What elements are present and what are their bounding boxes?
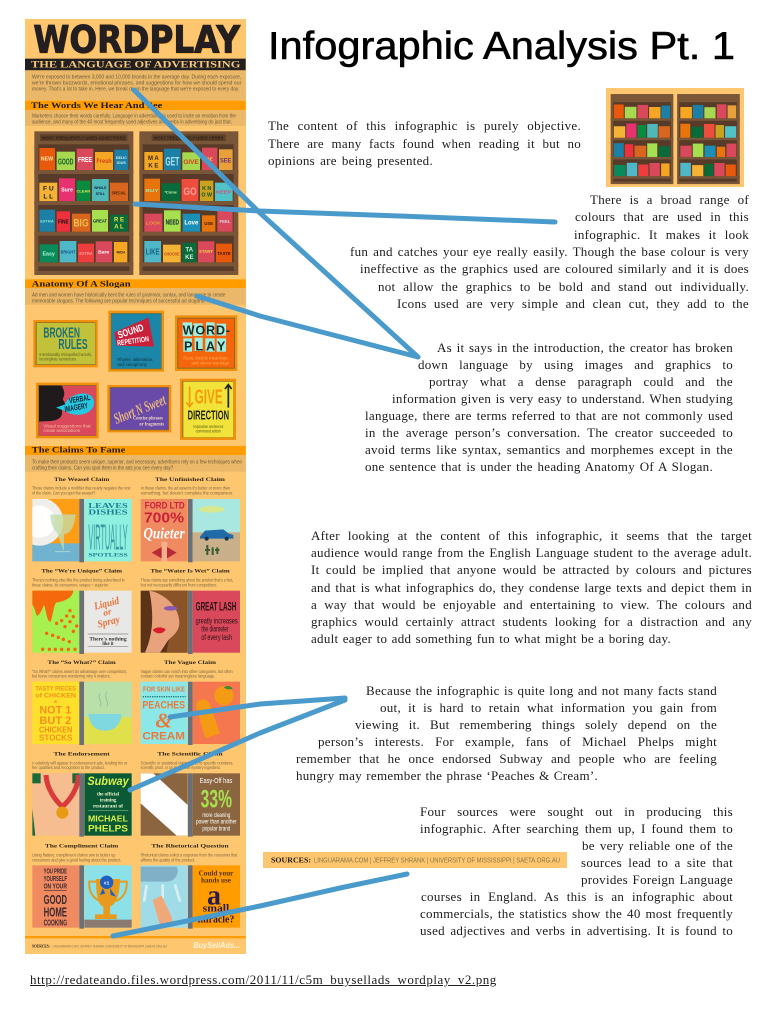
ad: Leaves Dishes: SPOTLESS xyxy=(88,553,128,559)
ad: Chicken Stocks: CHICKEN xyxy=(39,725,73,734)
shelf words: adjectives: Bare xyxy=(98,250,109,256)
ad: Small Miracle: small xyxy=(203,904,230,915)
arrow: sources to sources strip xyxy=(113,874,407,936)
ad: Easy-Off 33 percent: Easy-Off has xyxy=(200,776,233,785)
shelf words: verbs: K N xyxy=(202,186,211,192)
claim heading: Unique and Water Is Wet: The “We're Unique” Claim xyxy=(41,569,123,575)
claim heading: Endorsement and Scientific: The Endorsement xyxy=(54,752,110,758)
frame: Word-Play: and clever wordage xyxy=(191,360,230,366)
frame: Verbal Imagery: Visual suggestions that xyxy=(43,423,91,429)
shelf words: adjectives: L L xyxy=(43,193,53,200)
text block: target audience: graphics would certainly attract students looking for a distraction and any xyxy=(311,614,752,629)
shelf words: verbs: KE xyxy=(185,255,193,261)
claim heading: Compliment and Rhetorical: consumers and give a good feeling about the product. xyxy=(32,857,121,863)
shelf words: verbs: LOOK xyxy=(146,221,161,227)
shelf words: verbs: GO xyxy=(183,186,197,198)
section text: claims xyxy=(25,455,246,472)
text block: language: avoid terms like syntax, semantics and morphemes except in the xyxy=(365,442,733,457)
frame: Give Direction: DIRECTION xyxy=(188,409,229,423)
ad: Good Home Cooking: #1 xyxy=(104,880,110,886)
shelf words: adjectives xyxy=(40,155,127,257)
text block: language: As it says in the introduction, the creator has broken xyxy=(437,340,733,355)
claim heading: Unique and Water Is Wet: These claims say something about the product that's a fact, xyxy=(141,578,233,584)
shelf words: adjectives: IOUS xyxy=(117,161,126,165)
poster footer: sources and logo: SOURCES: xyxy=(32,945,50,949)
frame: Sound Repetition: Rhyme, alliteration, xyxy=(117,357,153,363)
shelf words: adjectives: STILL xyxy=(96,192,105,196)
ad: Peaches and Cream: FOR SKIN LIKE xyxy=(143,684,185,693)
section heading: The Claims To Fame xyxy=(25,446,246,455)
shelf words: verbs xyxy=(145,154,231,261)
shelf words: adjectives: Fresh xyxy=(96,158,112,165)
poster footer: sources and logo xyxy=(25,936,246,950)
shelf words: verbs: *Come xyxy=(164,190,178,195)
ad: Easy-Off 33 percent: 33% xyxy=(201,787,232,814)
text block: sources: infographic. After searching them up, I found them to xyxy=(420,821,733,836)
shelf words: adjectives: SPECIAL xyxy=(112,190,126,195)
ad bottoms: Chicken Stocks, Peaches and Cream text: CREAM xyxy=(142,731,185,743)
ad: Great Lash xyxy=(141,591,240,654)
claim heading: So What and Vague: The Vague Claim xyxy=(164,660,217,666)
ad: Chicken Stocks xyxy=(32,682,132,745)
ad: Chicken Stocks: BUT 2 xyxy=(39,715,71,727)
frame: Verbal Imagery xyxy=(36,383,99,438)
frame: Give Direction: GIVE xyxy=(195,386,223,409)
claim heading: So What and Vague: but leave consumers wondering why it matters. xyxy=(32,674,111,680)
claim heading: Weasel and Unfinished: The Unfinished Claim xyxy=(155,477,226,483)
claim heading: Compliment and Rhetorical: Using flattery, compliment claims aim to butter up xyxy=(32,853,116,859)
text block: objectivity: opinions are being presented. xyxy=(268,153,433,168)
shelf words: adjectives: FREE xyxy=(78,155,92,164)
section text: words xyxy=(25,110,246,126)
shelf words: verbs: GET xyxy=(165,154,180,168)
poster title: WORDPLAY: WORDPLAY xyxy=(34,19,242,63)
section: claims rows one to three: VIRTUALLY xyxy=(88,516,128,557)
poster subtitle band: THE LANGUAGE OF ADVERTISING xyxy=(31,61,240,71)
ad: Easy-Off 33 percent xyxy=(141,773,240,837)
text block: retention: remember that he once endorsed Subway and people who are feeling xyxy=(296,751,717,766)
section text: slogans: Ad men and women have historically bent the rules of grammar, syntax, and language to create xyxy=(32,293,225,299)
text block: target audience: adult eager to add something fun to what might be a boring day. xyxy=(311,631,671,646)
bookshelves xyxy=(34,131,238,275)
shelf words: verbs: O W xyxy=(201,193,213,199)
text block: colours and icons: Icons used are very simple and clean cut, they add to the xyxy=(397,296,749,311)
ad: Great Lash: the diameter xyxy=(201,624,229,633)
text block: colours and icons: ineffective as the graphics used are coloured similarly and it is does xyxy=(360,261,749,276)
shelf words: verbs: USE xyxy=(204,221,213,226)
claim heading: Weasel and Unfinished: The Weasel Claim xyxy=(54,477,110,483)
text block: objectivity xyxy=(268,118,581,168)
ad: Leaves Dishes xyxy=(32,499,132,562)
frame: Give Direction: command action xyxy=(196,428,221,434)
text block: target audience: a way that would be enjoyable and entertaining to view. The colours and xyxy=(311,597,752,612)
arrow lines: blue annotation strokes xyxy=(113,90,555,936)
ad: Subway Michael Phelps: MICHAEL xyxy=(88,814,128,824)
poster header and bookshelves xyxy=(25,18,246,275)
ad: Liquid or Spray: There's nothing xyxy=(89,636,127,642)
text block: objectivity: The content of this infographic is purely objective. xyxy=(268,118,581,133)
claim heading: Compliment and Rhetorical: affirms the quality of the product. xyxy=(141,857,195,863)
shelf words: adjectives: Easy xyxy=(42,251,55,257)
page title: Infographic Analysis Pt. 1 xyxy=(268,25,735,68)
frame: Verbal Imagery: create associations xyxy=(43,428,80,434)
claim heading: Unique and Water Is Wet xyxy=(32,569,233,588)
text block: sources: courses in England. As this is an infographic about xyxy=(421,889,733,904)
section text: slogans: memorable slogans. The following are popular techniques of successful ad slogans. xyxy=(32,299,205,305)
frame: Give Direction xyxy=(180,379,236,440)
text block: colours and icons: not allow the graphics to be bold and stand out individually. xyxy=(378,278,749,294)
text block: sources: Four sources were sought out in producing this xyxy=(420,804,733,819)
text block: target audience: and that is what infographics do, they condense large texts and depict them in xyxy=(311,580,752,595)
ad: Chicken Stocks: & xyxy=(54,699,58,705)
arrow: slogan text to language paragraph xyxy=(197,296,418,357)
claim heading: Unique and Water Is Wet: these claims. Its consumers, unique = superior. xyxy=(32,582,109,588)
claim heading: Weasel and Unfinished: something, but doesn't complete the comparison. xyxy=(141,490,233,496)
infographic: Wordplay poster xyxy=(15,18,246,954)
ad: Subway Michael Phelps: Subway xyxy=(87,774,130,788)
shelf words: adjectives: DELIC xyxy=(116,156,127,160)
inset: sources strip: SOURCES: xyxy=(271,856,311,864)
section: claims rows four and five and footer xyxy=(25,731,246,950)
shelf words: verbs: BE xyxy=(207,156,213,161)
frame: Broken Rules xyxy=(33,320,98,367)
section text: claims: crafting their claims. Can you spot them in the ads you see every day? xyxy=(32,465,173,471)
ad: Chicken Stocks: NOT 1 xyxy=(39,705,71,717)
ad: Liquid or Spray: or xyxy=(102,607,113,619)
text block: retention: out, it is hard to retain what information you gain from xyxy=(380,700,717,715)
frame: Sound Repetition xyxy=(108,311,164,372)
section heading: Anatomy Of A Slogan xyxy=(25,279,246,289)
ad: Liquid or Spray: Liquid xyxy=(92,596,121,613)
shelf words: verbs: K E xyxy=(148,164,158,170)
ad: Leaves Dishes: DISHES xyxy=(88,508,128,517)
frame: Sound Repetition: REPETITION xyxy=(117,334,149,348)
ad: Small Miracle: a xyxy=(207,880,221,911)
frame: Broken Rules: RULES xyxy=(58,337,88,353)
text block: target audience: audience would range from the English Language student to the average adult. xyxy=(311,545,752,560)
shelf words: adjectives: GOOD xyxy=(58,156,73,166)
claim heading: So What and Vague: Vague claims can reach into other categories, but often xyxy=(141,669,233,675)
frame: Sound Repetition: and cacophony xyxy=(117,362,147,368)
shelf words: adjectives: GREAT xyxy=(93,218,107,224)
text block: retention xyxy=(296,683,717,783)
ad: Easy-Off 33 percent: popular brand xyxy=(202,825,231,832)
shelf words: verbs: LIKE xyxy=(146,246,160,256)
ad: Good Home Cooking: HOME xyxy=(44,905,67,919)
frame: Word-Play: PLAY xyxy=(184,339,226,353)
poster intro text: We're exposed to between 3,000 and 10,000 brands in the average day. During each exposure, xyxy=(32,75,241,81)
text block: objectivity: There are many facts found when reading it but no xyxy=(268,136,581,150)
claim heading: Compliment and Rhetorical xyxy=(32,844,238,863)
section text: claims: To make their products seem unique, superior, and necessary, advertisers rely on a few techniques when xyxy=(32,459,242,465)
ad: Subway Michael Phelps: restaurant of xyxy=(93,805,123,810)
shelf words: adjectives: R E xyxy=(114,218,124,224)
shelf words: adjectives: RICH xyxy=(117,251,125,255)
shelf words: verbs: FEEL xyxy=(219,219,231,224)
shelf words: adjectives: WHOLE xyxy=(94,186,107,190)
claim heading: Endorsement and Scientific: A celebrity will appear in endorsement ads, lending his or xyxy=(32,761,128,767)
text block: colours and icons: There is a broad range of xyxy=(590,192,749,207)
ad: Small Miracle: hands use xyxy=(201,875,232,884)
frame: Short N Sweet: or fragments xyxy=(139,422,164,427)
claim heading: So What and Vague xyxy=(32,660,233,680)
claim heading: So What and Vague: “So What?” claims assert an advantage over competitors, xyxy=(32,669,127,675)
ad: Subway Michael Phelps: training xyxy=(100,799,117,804)
bookshelves: MOST FREQUENTLY USED VERBS xyxy=(154,135,223,140)
ad: Subway Michael Phelps xyxy=(32,773,132,837)
claim heading: Unique and Water Is Wet: but not necessarily different from competitors. xyxy=(141,582,217,588)
text block: retention: person’s interests. For example, fans of Michael Phelps might xyxy=(318,734,717,749)
ad: Good Home Cooking: YOURSELF xyxy=(44,874,67,883)
ad: Ford LTD: Quieter xyxy=(143,525,186,542)
poster intro text: we're thrown buzzwords, emotional phrases, and suggestions for how we should spend our xyxy=(32,81,242,87)
shelf words: verbs: TASTE xyxy=(217,251,231,257)
claim heading: Weasel and Unfinished: of the claim. Can you spot the weasel? xyxy=(32,490,95,496)
claim heading: Unique and Water Is Wet: There's nothing else like the product being advertised in xyxy=(32,578,125,584)
frame: Word-Play: WORD- xyxy=(183,323,230,337)
shelf words: verbs: KEEP xyxy=(216,190,231,195)
section text: slogans xyxy=(25,288,246,305)
claim heading: Unique and Water Is Wet: The “Water Is Wet” Claim xyxy=(150,569,230,575)
text block: retention: Because the infographic is quite long and not many facts stand xyxy=(366,683,717,698)
claim heading: Endorsement and Scientific: scientific proof, or an impressive mystery ingredient. xyxy=(141,765,221,771)
ad: Liquid or Spray: Spray xyxy=(96,614,121,631)
text block: target audience: After looking at the content of this infographic, it seems that the target xyxy=(311,528,752,543)
claim heading: So What and Vague: The “So What?” Claim xyxy=(48,660,116,666)
poster subtitle band xyxy=(25,59,246,71)
text block: colours and icons: infographic. It makes it look xyxy=(574,227,749,242)
ad: Good Home Cooking: YOU PRIDE xyxy=(44,867,67,876)
ad: Good Home Cooking xyxy=(32,865,132,929)
claim heading: Weasel and Unfinished xyxy=(32,477,233,496)
ad: Great Lash: of every lash xyxy=(201,633,232,642)
shelf words: adjectives: EXTRA xyxy=(40,218,54,223)
shelf words: verbs: Love xyxy=(184,220,199,226)
text block: language: down language by using images and graphics to xyxy=(418,357,733,372)
text block: sources: used adjectives and verbs in advertising. It is found to xyxy=(420,923,733,938)
frame: Verbal Imagery: IMAGERY xyxy=(64,401,89,414)
section: Anatomy Of A Slogan xyxy=(25,279,246,496)
text block: sources: sources lead to a site that xyxy=(581,855,733,870)
ad: Great Lash: greatly increases xyxy=(196,616,238,625)
ad: Small Miracle: miracle? xyxy=(198,914,234,925)
claim heading: Weasel and Unfinished: In these claims, the ad asserts it's better or more than xyxy=(141,486,230,492)
frame: Word-Play: Puns, double meanings, xyxy=(183,356,229,362)
shelf words: verbs: GIVE xyxy=(183,159,199,166)
poster footer: sources and logo: LINGUARAMA.COM | JEFFREY SHRANK | UNIVERSITY OF MISSISSIPPI | SAETA.ORG.AU xyxy=(53,945,167,949)
frame: Give Direction: Imperative sentences xyxy=(193,424,224,430)
text block: sources: be very reliable one of the xyxy=(582,838,733,853)
text block: sources: provides Foreign Language xyxy=(581,872,733,887)
bookshelves: MOST FREQUENTLY USED ADJECTIVES xyxy=(42,135,125,140)
text block: colours and icons: colours that are used in this xyxy=(575,209,749,224)
claim heading: Endorsement and Scientific: The Scientific Claim xyxy=(157,752,223,758)
text block: language: one sentence that is under the heading Anatomy Of A Slogan. xyxy=(365,459,713,474)
frame: Sound Repetition: SOUND xyxy=(117,323,145,341)
ad: Chicken Stocks: STOCKS xyxy=(39,733,73,742)
claim heading: Endorsement and Scientific xyxy=(32,752,233,771)
text block: language: information given is very easy to understand. When studying xyxy=(392,391,733,406)
section heading: The Words We Hear And See: The Words We Hear And See xyxy=(31,101,163,110)
inset: bookshelf crop xyxy=(606,88,744,187)
claim heading: Endorsement and Scientific: her qualities and recognition to the product. xyxy=(32,765,105,771)
ad: Peaches and Cream xyxy=(141,682,240,745)
claim heading: Weasel and Unfinished: These claims include a modifier that nearly negates the rest xyxy=(32,486,131,492)
poster footer: sources and logo: BuySellAds... xyxy=(193,940,240,950)
ad: Liquid or Spray xyxy=(32,591,132,654)
text block: target audience xyxy=(311,528,752,646)
poster intro text: money. That's a lot to take in. Here, we break down the language that we're exposed to every day. xyxy=(32,87,239,93)
shelf words: adjectives: NEW xyxy=(41,157,54,163)
frame: Broken Rules: BROKEN xyxy=(43,325,80,341)
text block: target audience: It could be implied that anyone would be attracted by colours and pictures xyxy=(311,562,752,577)
claim heading: Endorsement and Scientific: Scientific or statistical claims refer to specific numbers, xyxy=(141,761,233,767)
ad: Peaches and Cream: & xyxy=(155,708,172,732)
ad: Ford LTD: 700% xyxy=(144,511,184,527)
section: claims rows one to three xyxy=(15,498,240,745)
source link: http://redateando.files.wordpress.com/2011/11/c5m_buysellads_wordplay_v2.png xyxy=(30,972,497,987)
arrow: subway ad to retention paragraph xyxy=(130,700,345,790)
text block: language: in the average person’s conversation. The creator succeeded to xyxy=(365,425,733,440)
ad: Good Home Cooking: ON YOUR xyxy=(44,881,67,890)
frame: Broken Rules: incomplete sentences xyxy=(39,357,76,363)
frame: Word-Play xyxy=(175,315,237,371)
shelf words: verbs: M A xyxy=(148,156,159,162)
shelf words: verbs: TA xyxy=(186,248,194,254)
frame: Verbal Imagery: VERBAL xyxy=(68,393,91,405)
claim heading: So What and Vague: contain colorful yet meaningless language. xyxy=(141,674,215,680)
ad: Good Home Cooking: COOKING xyxy=(44,917,67,927)
arrow: bookshelves to colours paragraph xyxy=(135,204,555,222)
ad: Subway Michael Phelps: the official xyxy=(97,793,120,798)
text block: language xyxy=(365,340,733,474)
frame: Short N Sweet: Concise phrases xyxy=(133,417,163,422)
ad: Great Lash: GREAT LASH xyxy=(196,600,236,614)
ad: Leaves Dishes: LEAVES xyxy=(88,501,128,510)
frame: Short N Sweet: Short N Sweet xyxy=(111,391,169,428)
section text: words: audience, and many of the 40 most frequently used adjectives and verbs in advertising do just that. xyxy=(32,120,232,126)
claim heading: Compliment and Rhetorical: The Compliment Claim xyxy=(45,844,119,850)
ad: Ford LTD xyxy=(141,499,240,562)
section heading: The Words We Hear And See xyxy=(25,101,246,110)
ad: Easy-Off 33 percent: power than another xyxy=(196,819,237,826)
section heading: The Claims To Fame: The Claims To Fame xyxy=(32,446,126,455)
frame: Broken Rules: Intentionally misspelled words, xyxy=(39,352,92,358)
arrow: intro to language paragraph xyxy=(134,90,418,357)
ad: Easy-Off 33 percent: more cleaning xyxy=(202,812,231,819)
shelf words: verbs: NEED xyxy=(166,217,179,226)
inset: sources strip xyxy=(263,852,567,868)
ad: Subway Michael Phelps: PHELPS xyxy=(88,824,128,834)
shelf words: verbs: START xyxy=(199,249,213,254)
ad: Small Miracle: Could your xyxy=(199,868,234,877)
ad: Chicken Stocks: of CHICKEN xyxy=(35,692,76,699)
shelf words: verbs: BUY xyxy=(145,188,160,194)
shelf words: adjectives: F U xyxy=(43,186,54,193)
ad: Good Home Cooking: GOOD xyxy=(44,893,67,907)
ad: Chicken Stocks: TASTY PIECES xyxy=(35,685,76,692)
claim heading: Compliment and Rhetorical: The Rhetorical Question xyxy=(151,844,229,850)
text block: language: language, there are terms referred to that are not commonly used xyxy=(365,408,733,423)
poster title: WORDPLAY: WORDPLAY xyxy=(33,18,241,62)
ad: Ford LTD: FORD LTD xyxy=(145,501,185,511)
text block: language: portray what a dense paragraph could and the xyxy=(429,374,733,389)
shelf words: verbs: SEE xyxy=(220,158,231,164)
arrow: peaches ad to retention paragraph xyxy=(170,698,345,717)
text block: retention: hungry may remember the phrase ‘Peaches & Cream’. xyxy=(296,768,598,783)
shelf words: verbs: CHOOSE xyxy=(164,252,179,257)
ad: Liquid or Spray: like it xyxy=(102,642,114,647)
shelf words: adjectives: BRIGHT xyxy=(61,250,76,255)
shelf words: adjectives: FINE xyxy=(58,220,69,226)
poster intro text xyxy=(25,70,246,100)
section text: words: Marketers choose their words carefully. Language in advertising is used to incite an emotion from the xyxy=(32,114,236,120)
section heading: Anatomy Of A Slogan: Anatomy Of A Slogan xyxy=(32,280,131,289)
text block: retention: viewing it. But remembering things solely depend on the xyxy=(355,717,717,732)
shelf words: adjectives: CLEAN xyxy=(76,188,90,193)
text block: sources: commercials, the statistics show the 40 most frequently xyxy=(420,906,733,921)
text block: sources xyxy=(420,804,733,938)
shelf words: adjectives: EXTRA xyxy=(79,251,93,257)
claim heading: Compliment and Rhetorical: Rhetorical claims solicit a response from the consumer that xyxy=(141,853,238,859)
ad: Peaches and Cream: PEACHES xyxy=(142,700,185,712)
text block: colours and icons xyxy=(350,192,749,311)
ad: Small Miracle xyxy=(141,865,240,929)
frame: Short N Sweet xyxy=(107,385,171,432)
shelf words: adjectives: Sure xyxy=(61,188,73,194)
inset: sources strip: LINGUARAMA.COM | JEFFREY SHRANK | UNIVERSITY OF MISSISSIPPI | SAETA.ORG.AU xyxy=(314,856,560,864)
shelf words: adjectives: A L xyxy=(114,224,124,230)
shelf words: adjectives: BIG xyxy=(73,217,89,229)
text block: colours and icons: fun and catches your eye really easily. Though the base colour is very xyxy=(350,244,749,259)
